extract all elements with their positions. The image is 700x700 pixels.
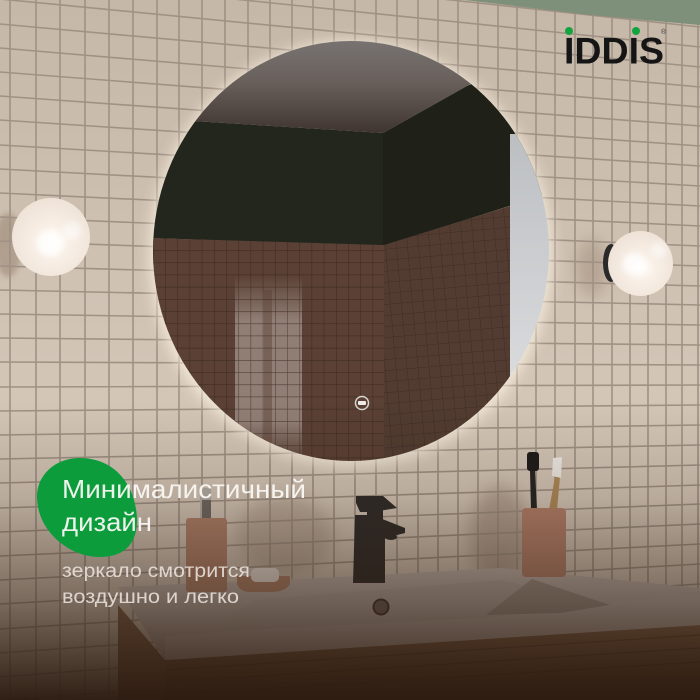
- mirror: reflected mosaic right wall: [384, 206, 510, 470]
- heading: [62, 474, 306, 537]
- mirror backlight glow: [150, 41, 552, 467]
- logo: IDDIS: IDDIS: [564, 30, 664, 72]
- heading: Минималистичный: [62, 474, 306, 504]
- basin drain: [374, 600, 388, 614]
- subheading: воздушно и легко: [62, 587, 239, 608]
- logo dot second: [632, 27, 640, 35]
- left wall lamp: [12, 198, 90, 276]
- right wall lamp: [603, 231, 673, 296]
- soap dispenser: [186, 488, 227, 592]
- subheading: [62, 561, 250, 608]
- green painted wall top right: [465, 0, 700, 25]
- mirror: reflected dark green wall right: [383, 84, 542, 245]
- basin reflection: [486, 579, 610, 615]
- logo dot first: [565, 27, 573, 35]
- touch button on mirror: [356, 396, 368, 410]
- green blob: [37, 458, 137, 557]
- soap dish: [237, 568, 290, 592]
- round mirror: [150, 30, 560, 470]
- dark bottom gradient overlay: [0, 400, 700, 700]
- toothbrush bamboo: [549, 457, 562, 510]
- subheading: зеркало смотрится: [62, 561, 250, 582]
- heading: дизайн: [62, 507, 152, 537]
- mirror: reflected bright window: [510, 134, 549, 376]
- logo registered mark: ®: [661, 28, 667, 36]
- mirror: reflected dark green wall left: [150, 118, 383, 246]
- mirror: reflected ceiling: [195, 41, 471, 133]
- washbasin: [118, 568, 700, 660]
- terracotta cup: [522, 508, 566, 577]
- vanity cabinet: [118, 605, 700, 700]
- mirror: reflected mosaic left wall: [150, 238, 384, 470]
- toothbrush black: [527, 452, 539, 510]
- black faucet: [353, 496, 405, 583]
